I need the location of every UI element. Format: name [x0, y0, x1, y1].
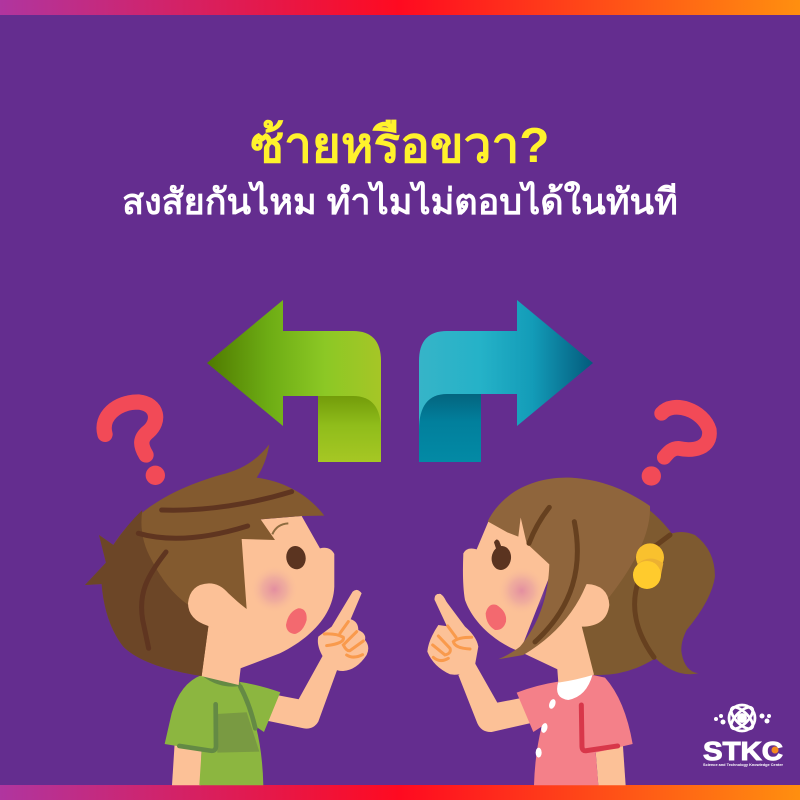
- girl top hair: [488, 478, 650, 659]
- logo wordmark: STKC: [703, 736, 783, 766]
- bottom gradient bar: [0, 785, 800, 800]
- girl mouth: [486, 605, 506, 630]
- arrow: left green: [207, 300, 381, 462]
- boy hand: [318, 590, 368, 671]
- boy face: [201, 516, 334, 685]
- girl hair strands: [529, 507, 670, 657]
- boy ear: [188, 583, 247, 633]
- boy lower arm skin: [172, 743, 202, 785]
- boy character: [85, 444, 368, 785]
- boy hair shadow: [85, 510, 208, 676]
- girl ear: [568, 584, 609, 627]
- boy eye: [284, 544, 308, 571]
- girl arm: [458, 663, 530, 732]
- boy blush: [250, 565, 298, 613]
- boy eyebrow: [272, 523, 288, 534]
- girl dress: [517, 675, 633, 785]
- subtitle: สงสัยกันไหม ทำไมไม่ตอบได้ในทันที: [122, 181, 678, 222]
- boy arm: [267, 652, 338, 729]
- girl hair tie: [633, 543, 664, 589]
- girl neck and jaw skin: [520, 580, 594, 683]
- girl face: [463, 517, 553, 652]
- girl finger lines: [433, 626, 472, 661]
- logo dot: [772, 746, 778, 754]
- boy shirt: [165, 675, 280, 785]
- girl lower arm skin: [595, 742, 626, 785]
- boy hair strands: [138, 492, 292, 648]
- logo atom icon: [728, 704, 756, 732]
- icon: left question mark: [104, 402, 165, 485]
- girl blush: [498, 567, 546, 615]
- boy mouth: [286, 608, 307, 634]
- girl eye: [490, 540, 513, 571]
- girl back hair and ponytail: [567, 478, 715, 675]
- logo dots: [714, 714, 771, 724]
- girl sleeve seam: [581, 705, 618, 751]
- title: ซ้ายหรือขวา?: [250, 118, 550, 173]
- logo: STKC: [703, 704, 783, 767]
- boy finger lines: [324, 622, 363, 657]
- girl buttons: [536, 698, 557, 758]
- boy hair: [85, 444, 324, 676]
- logo tagline: Science and Technology Knowledge Center: [703, 762, 783, 767]
- top gradient bar: [0, 0, 800, 15]
- boy shirt seams: [179, 675, 255, 751]
- arrow: right blue: [419, 300, 593, 462]
- icon: right question mark: [642, 407, 710, 486]
- girl hand: [427, 594, 478, 675]
- girl collar: [557, 674, 593, 700]
- girl character: [427, 478, 715, 785]
